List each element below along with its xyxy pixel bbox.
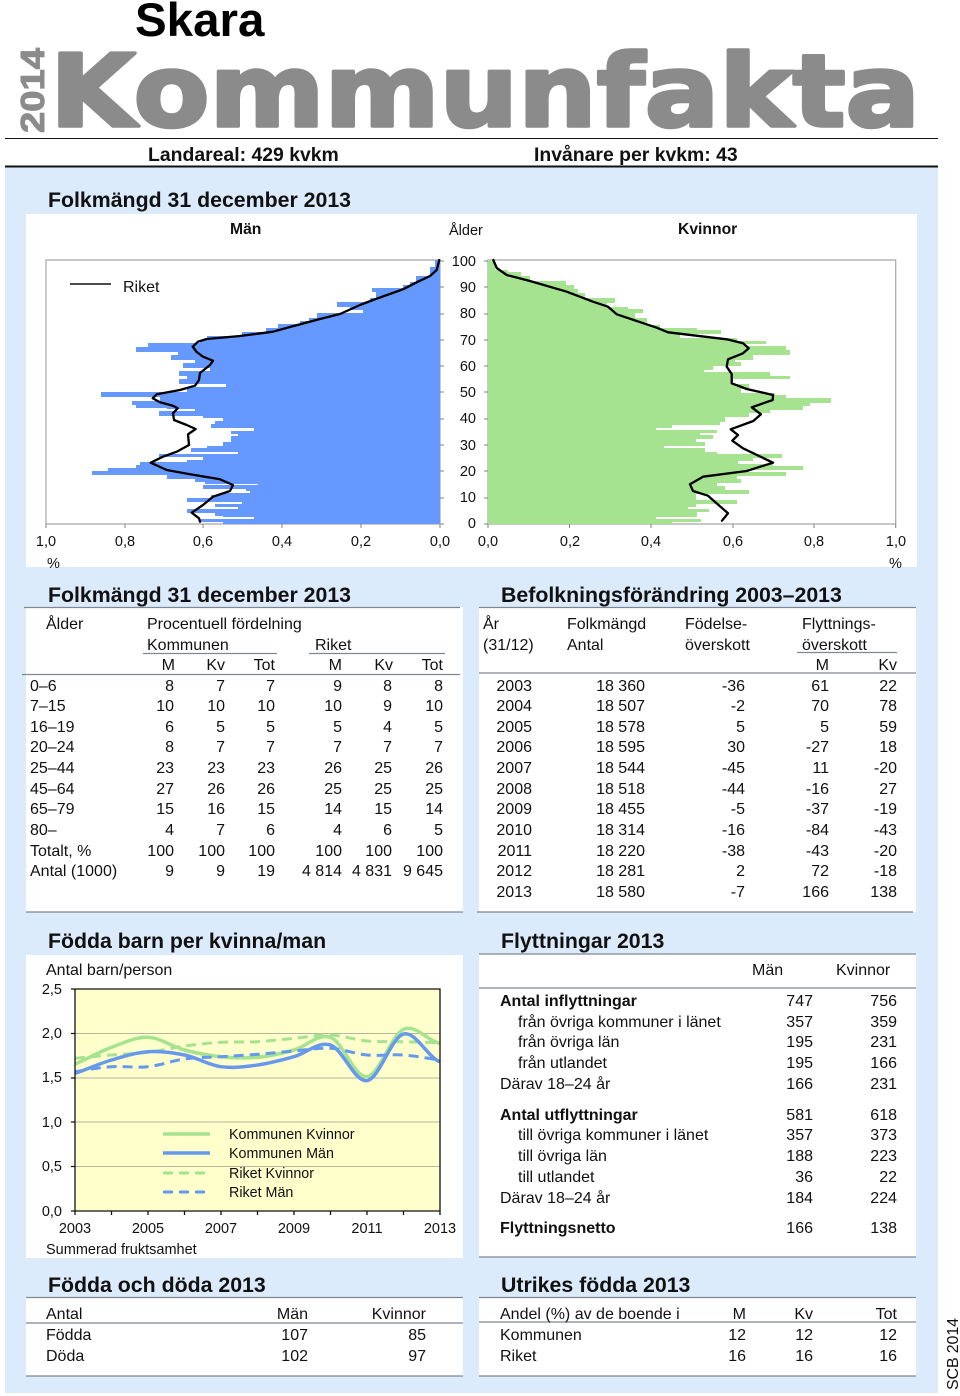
chart legend: Riket Kvinnor [229, 1166, 314, 1182]
panel: births and deaths table: 85 [408, 1327, 426, 1344]
incoming migration rows: 359 [870, 1014, 897, 1031]
panel: births and deaths table: Antal [46, 1306, 82, 1323]
panel: foreign born table: 16 [728, 1348, 746, 1365]
table rows: 18 518 [596, 781, 645, 798]
chart legend: Riket Män [229, 1185, 293, 1201]
table rows: 7 [216, 822, 225, 839]
age axis labels: 20 [460, 464, 476, 480]
percent axis labels: 0,2 [560, 534, 580, 550]
outgoing migration rows: till övriga kommuner i länet [518, 1127, 709, 1144]
legend: national [70, 279, 160, 296]
table rows: 10 [156, 698, 174, 715]
panel: foreign born table: M [733, 1306, 746, 1323]
table rows: 2010 [496, 822, 532, 839]
table header: Kvinnor [836, 962, 891, 979]
table header: Folkmängd [567, 616, 646, 633]
table rows: 7 [266, 739, 275, 756]
percent axis labels: 0,0 [478, 534, 498, 550]
table rows: Antal (1000) [30, 863, 117, 880]
incoming migration rows: 195 [786, 1034, 813, 1051]
table rows: -36 [722, 678, 745, 695]
table rows: 23 [207, 760, 225, 777]
bars: women by age [488, 260, 831, 524]
table rows: -16 [722, 822, 745, 839]
table rows: -7 [731, 884, 745, 901]
table header: M [329, 657, 342, 674]
outgoing migration rows: Antal utflyttningar [500, 1107, 638, 1124]
table rows: 6 [266, 822, 275, 839]
outgoing migration rows: 22 [879, 1169, 897, 1186]
incoming migration rows: 357 [786, 1014, 813, 1031]
table rows: 16 [207, 801, 225, 818]
table rows: -19 [874, 801, 897, 818]
incoming migration rows: 231 [870, 1034, 897, 1051]
chart caption: Summerad fruktsamhet [46, 1242, 197, 1258]
age axis labels: 50 [460, 385, 476, 401]
table header: Födelse- [685, 616, 747, 633]
table rows: 26 [257, 781, 275, 798]
percent axis labels: 1,0 [36, 534, 56, 550]
year label: 2014: 2014 [14, 47, 51, 133]
table rows: 10 [324, 698, 342, 715]
table rows: 2006 [496, 739, 532, 756]
line: municipality men [75, 1034, 440, 1081]
y axis labels: 2,0 [42, 1026, 62, 1042]
age axis labels: 60 [460, 359, 476, 375]
table rows: 26 [207, 781, 225, 798]
table header: M [162, 657, 175, 674]
panel: foreign born table [479, 1297, 916, 1376]
table rows: 8 [383, 678, 392, 695]
panel: age distribution table [22, 607, 463, 912]
table rows: 8 [165, 739, 174, 756]
table rows: 20–24 [30, 739, 75, 756]
table rows: 4 [383, 719, 392, 736]
key fact: land area: Landareal: 429 kvkm [148, 144, 339, 166]
incoming migration rows: från utlandet [518, 1054, 608, 1072]
net migration row: 138 [870, 1220, 897, 1237]
table rows: -16 [806, 781, 829, 798]
table rows: 80– [30, 822, 57, 839]
table rows: 26 [324, 760, 342, 777]
table rows: -38 [722, 843, 745, 860]
percent axis labels: 0,4 [641, 534, 661, 550]
table rows: 18 580 [596, 884, 645, 901]
net migration row: Flyttningsnetto [500, 1220, 616, 1237]
incoming migration rows: 231 [870, 1076, 897, 1093]
table header: M [816, 657, 829, 674]
table rows: -2 [731, 698, 745, 715]
table rows: 2013 [496, 884, 532, 901]
table rows: -43 [806, 843, 829, 860]
table rows: 15 [257, 801, 275, 818]
outgoing migration rows: till övriga län [518, 1148, 607, 1165]
x axis labels [59, 1221, 456, 1237]
line: national men [151, 260, 439, 522]
table rows: 100 [248, 843, 275, 860]
incoming migration rows: 747 [786, 993, 813, 1010]
heading: births per woman/man: Födda barn per kvinna/man [48, 929, 326, 953]
table header: Kv [206, 657, 225, 674]
table rows: 30 [727, 739, 745, 756]
table rows: 18 595 [596, 739, 645, 756]
outgoing migration rows: till utlandet [518, 1169, 595, 1186]
table rows: 2007 [496, 760, 532, 777]
table rows: 59 [879, 719, 897, 736]
line: national women [493, 260, 773, 521]
age axis labels: 40 [460, 411, 476, 427]
table header [46, 614, 444, 674]
table rows: 10 [425, 698, 443, 715]
table rows: 5 [216, 719, 225, 736]
table rows: -20 [874, 760, 897, 777]
incoming migration rows [500, 993, 897, 1093]
net migration row: 166 [786, 1220, 813, 1237]
plot frame and ticks [71, 989, 440, 1215]
table rows: 19 [257, 863, 275, 880]
table header: överskott [802, 637, 867, 654]
percent axis labels: % [889, 556, 902, 572]
table header: Kv [374, 657, 393, 674]
table rows: 6 [383, 822, 392, 839]
chart legend [163, 1127, 355, 1201]
x axis labels: 2005 [132, 1221, 164, 1237]
table rows: 100 [365, 843, 392, 860]
table header: Flyttnings- [802, 616, 876, 633]
percent axis labels: 1,0 [886, 534, 906, 550]
table rows: 100 [147, 843, 174, 860]
table header: Ålder [46, 614, 84, 633]
outgoing migration rows: 223 [870, 1148, 897, 1165]
heading: migration: Flyttningar 2013 [501, 929, 664, 953]
table rows: -20 [874, 843, 897, 860]
y axis labels: 2,5 [42, 982, 62, 998]
table rows: 18 314 [596, 822, 645, 839]
panel: population change table [477, 607, 916, 912]
table rows: 100 [315, 843, 342, 860]
panel: foreign born table: Andel (%) av de boende i [500, 1306, 680, 1323]
y axis labels [42, 982, 62, 1220]
table rows: 18 [879, 739, 897, 756]
line: national men [75, 1048, 440, 1072]
table rows: 10 [207, 698, 225, 715]
plot area [75, 989, 440, 1211]
table header: Tot [254, 657, 276, 674]
panel: births and deaths table: 102 [281, 1348, 308, 1365]
table rows [30, 678, 443, 880]
table rows: 138 [870, 884, 897, 901]
table rows: 18 281 [596, 863, 645, 880]
pyramid column heading: age: Ålder [449, 222, 483, 239]
table rows: -27 [806, 739, 829, 756]
panel: births and deaths table: Kvinnor [372, 1306, 427, 1323]
panel: foreign born table: 12 [879, 1327, 897, 1344]
table rows: 25 [324, 781, 342, 798]
table rows: 65–79 [30, 801, 75, 818]
heading: population change: Befolkningsförändring 2003–2013 [501, 583, 842, 607]
percent axis labels: 0,6 [723, 534, 743, 550]
outgoing migration rows [500, 1107, 897, 1207]
table rows: -18 [874, 863, 897, 880]
x axis labels: 2007 [205, 1221, 237, 1237]
table rows: -37 [806, 801, 829, 818]
x axis labels: 2009 [278, 1221, 310, 1237]
chart legend: Kommunen Kvinnor [229, 1127, 355, 1143]
header rules [5, 138, 938, 166]
age axis labels: 80 [460, 306, 476, 322]
table rows: 9 [383, 698, 392, 715]
table header: överskott [685, 637, 750, 654]
table rows: 15 [374, 801, 392, 818]
table rows: 25–44 [30, 760, 75, 777]
panel: foreign born table: Riket [500, 1348, 537, 1365]
table rows: 2012 [496, 863, 532, 880]
table header: År [483, 614, 500, 633]
table rows: 5 [333, 719, 342, 736]
table rows: 18 507 [596, 698, 645, 715]
incoming migration rows: från övriga län [518, 1033, 619, 1051]
table rows: 2011 [498, 843, 532, 860]
heading: population pyramid: Folkmängd 31 december 2013 [48, 188, 351, 212]
age axis labels: 90 [460, 280, 476, 296]
incoming migration rows: från övriga kommuner i länet [518, 1013, 721, 1031]
table rows: 4 831 [352, 863, 392, 880]
bars: men by age [92, 260, 440, 524]
table rows: 100 [198, 843, 225, 860]
pyramid column heading: women: Kvinnor [678, 221, 737, 238]
table header: (31/12) [483, 637, 534, 654]
table rows: 4 814 [302, 863, 342, 880]
panel: births and deaths table [26, 1297, 463, 1376]
table rows: 18 544 [596, 760, 645, 777]
table rows: 9 645 [403, 863, 443, 880]
table rows: 7 [266, 678, 275, 695]
table header: Kv [878, 657, 897, 674]
panel: fertility chart [26, 955, 463, 1258]
table rows: 2008 [496, 781, 532, 798]
table rows: 100 [416, 843, 443, 860]
table rows: 78 [879, 698, 897, 715]
incoming migration rows: Antal inflyttningar [500, 993, 637, 1010]
table rows: -45 [722, 760, 745, 777]
table rows: 25 [374, 781, 392, 798]
x axis labels: 2013 [424, 1221, 456, 1237]
table rows: -44 [722, 781, 745, 798]
incoming migration rows: 166 [786, 1076, 813, 1093]
table rows: 8 [165, 678, 174, 695]
table rows: 5 [736, 719, 745, 736]
table header: Antal [567, 637, 603, 654]
table rows: 7 [333, 739, 342, 756]
table header [752, 962, 891, 979]
heading: age table: Folkmängd 31 december 2013 [48, 583, 351, 607]
table rows: 5 [266, 719, 275, 736]
outgoing migration rows: 224 [870, 1190, 897, 1207]
outgoing migration rows: 36 [795, 1169, 813, 1186]
outgoing migration rows: 618 [870, 1107, 897, 1124]
incoming migration rows: 195 [786, 1055, 813, 1072]
table rows: 18 455 [596, 801, 645, 818]
outgoing migration rows: 373 [870, 1127, 897, 1144]
y axis labels: 1,0 [42, 1115, 62, 1131]
table rows: 7 [434, 739, 443, 756]
age axis labels: 0 [468, 516, 476, 532]
chart unit label: Antal barn/person [46, 962, 172, 979]
percent axis labels: % [47, 556, 60, 572]
table rows: 9 [216, 863, 225, 880]
table rows: -5 [731, 801, 745, 818]
table rows: 70 [811, 698, 829, 715]
table header [483, 614, 897, 674]
table rows: 23 [156, 760, 174, 777]
incoming migration rows: 756 [870, 993, 897, 1010]
table rows: 27 [156, 781, 174, 798]
panel: foreign born table: 16 [795, 1348, 813, 1365]
percent axis labels: 0,4 [272, 534, 292, 550]
table rows: 2003 [496, 678, 532, 695]
panel: foreign born table: Tot [876, 1306, 898, 1323]
table rows: 7 [216, 678, 225, 695]
y axis labels: 0,0 [42, 1204, 62, 1220]
table rows: 45–64 [30, 781, 75, 798]
age axis labels: 10 [460, 490, 476, 506]
panel: foreign born table: Kommunen [500, 1327, 582, 1344]
table rows: 10 [257, 698, 275, 715]
percent axis labels: 0,8 [804, 534, 824, 550]
percent axis labels: 0,6 [193, 534, 213, 550]
incoming migration rows: 166 [870, 1055, 897, 1072]
table rows: 5 [434, 719, 443, 736]
line: municipality women [75, 1028, 440, 1077]
table rows: Totalt, % [30, 843, 91, 860]
table rows: 7 [216, 739, 225, 756]
table rows: 7 [383, 739, 392, 756]
axis ticks [46, 261, 896, 528]
table rows: 9 [333, 678, 342, 695]
table rows: 27 [879, 781, 897, 798]
percent axis labels: 0,0 [430, 534, 450, 550]
incoming migration rows: Därav 18–24 år [500, 1075, 611, 1093]
table rows: 8 [434, 678, 443, 695]
age axis labels: 30 [460, 438, 476, 454]
pyramid frame right [488, 260, 896, 524]
pyramid frame left [46, 260, 440, 524]
table rows [496, 678, 897, 901]
table header: Tot [422, 657, 444, 674]
outgoing migration rows: 581 [786, 1107, 813, 1124]
table rows: 4 [333, 822, 342, 839]
table rows: -84 [806, 822, 829, 839]
table rows: 25 [425, 781, 443, 798]
net migration row [500, 1220, 897, 1237]
table rows: 5 [820, 719, 829, 736]
panel: births and deaths table: Män [277, 1306, 308, 1323]
x axis labels: 2011 [351, 1221, 383, 1237]
outgoing migration rows: 357 [786, 1127, 813, 1144]
panel: foreign born table: Kv [794, 1306, 813, 1323]
table rows: 2004 [496, 698, 532, 715]
line: national women [75, 1035, 440, 1058]
table header: Kommunen [147, 637, 229, 654]
key fact: density: Invånare per kvkm: 43 [534, 143, 738, 166]
table rows: 15 [156, 801, 174, 818]
panel: population pyramid [26, 214, 917, 572]
percent axis labels: 0,2 [351, 534, 371, 550]
table rows: 22 [879, 678, 897, 695]
table rows: 16–19 [30, 719, 75, 736]
table rows: 14 [324, 801, 342, 818]
table rows: 5 [434, 822, 443, 839]
percent axis labels: 0,8 [115, 534, 135, 550]
table rows: 2 [736, 863, 745, 880]
table rows: 2005 [496, 719, 532, 736]
panel: births and deaths table: Födda [46, 1327, 91, 1344]
table rows: 14 [425, 801, 443, 818]
table rows: 26 [425, 760, 443, 777]
age axis labels [452, 254, 476, 532]
table header: Procentuell fördelning [147, 616, 302, 633]
table rows: 11 [812, 760, 829, 777]
table rows: 0–6 [30, 678, 57, 695]
y axis labels: 1,5 [42, 1070, 62, 1086]
table rows: 18 578 [596, 719, 645, 736]
table rows: 61 [811, 678, 829, 695]
table header: Män [752, 962, 783, 979]
panel: births and deaths table: 107 [281, 1327, 308, 1344]
table rows: 166 [802, 884, 829, 901]
table rows: 18 220 [596, 843, 645, 860]
age axis labels: 100 [452, 254, 476, 270]
panel: foreign born table: 12 [795, 1327, 813, 1344]
table rows: 7–15 [30, 698, 66, 715]
x axis labels: 2003 [59, 1221, 91, 1237]
panel: foreign born table: 12 [728, 1327, 746, 1344]
table rows: 2009 [496, 801, 532, 818]
table rows: 72 [811, 863, 829, 880]
chart legend: Kommunen Män [229, 1146, 334, 1162]
table header: Riket [315, 637, 352, 654]
heading: foreign born: Utrikes födda 2013 [501, 1273, 691, 1297]
y axis labels: 0,5 [42, 1159, 62, 1175]
pyramid column heading: men: Män [230, 221, 261, 238]
percent axis labels [36, 534, 906, 572]
outgoing migration rows: 188 [786, 1148, 813, 1165]
panel: foreign born table: 16 [879, 1348, 897, 1365]
age axis labels: 70 [460, 333, 476, 349]
panel: births and deaths table: 97 [408, 1348, 426, 1365]
table rows: -43 [874, 822, 897, 839]
outgoing migration rows: Därav 18–24 år [500, 1189, 611, 1207]
table rows: 9 [165, 863, 174, 880]
table rows: 23 [257, 760, 275, 777]
panel: births and deaths table: Döda [46, 1348, 84, 1365]
table rows: 18 360 [596, 678, 645, 695]
outgoing migration rows: 184 [786, 1190, 813, 1207]
panel: migration table [479, 954, 916, 1257]
table rows: 6 [165, 719, 174, 736]
logo: Kommunfakta: Kommunfakta [50, 33, 920, 150]
legend: national: Riket [123, 279, 160, 296]
heading: births and deaths: Födda och döda 2013 [48, 1273, 266, 1297]
table rows: 25 [374, 760, 392, 777]
table rows: 4 [165, 822, 174, 839]
